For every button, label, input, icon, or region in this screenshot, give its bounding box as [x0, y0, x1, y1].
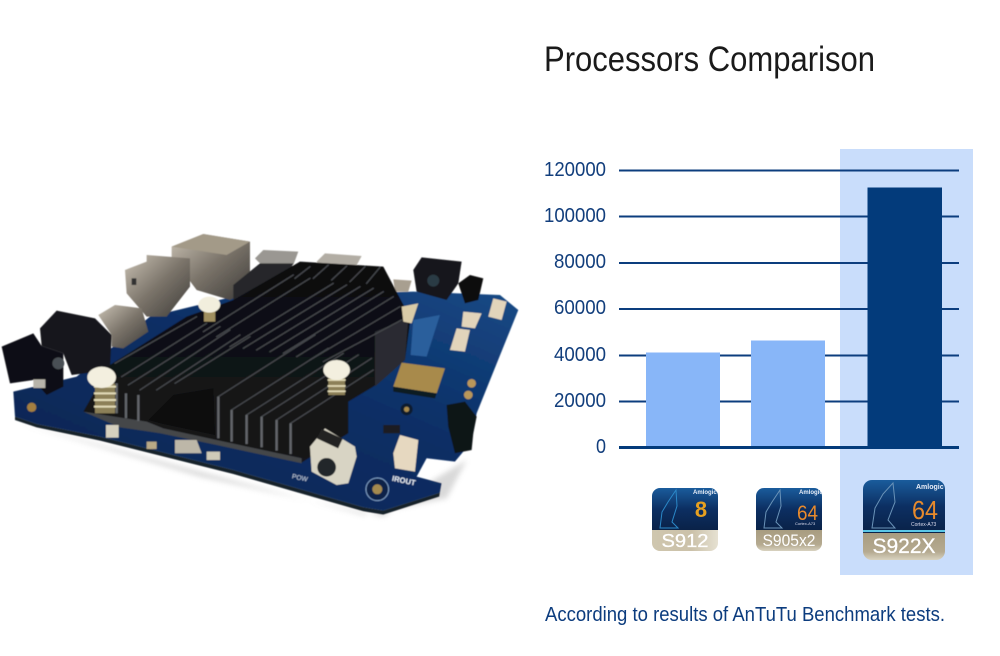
bar: S922X [868, 188, 942, 448]
bar: S912 [646, 352, 720, 446]
power button [310, 428, 357, 485]
y-axis labels [544, 158, 606, 458]
bar: S905x2 [751, 340, 825, 446]
silkscreen label: POW: POW [291, 473, 309, 484]
silkscreen label: IROUT: IROUT [391, 474, 417, 488]
chip badge: S912 [652, 488, 718, 551]
PCB [13, 292, 518, 511]
y-axis labels: 60000 [554, 296, 606, 319]
y-axis labels: 40000 [554, 343, 606, 366]
spring posts [87, 297, 350, 438]
y-axis labels: 120000 [544, 158, 606, 181]
y-axis labels: 20000 [554, 389, 606, 412]
heatsink base [83, 412, 302, 463]
chip badge: S905x2: S905x2 [762, 531, 816, 550]
front fin ends [117, 383, 291, 454]
y-axis labels: 80000 [554, 250, 606, 273]
chip badge: S905x2: Amlogic [799, 490, 823, 496]
y-axis labels: 100000 [544, 204, 606, 227]
heatsink [83, 262, 411, 463]
chip badge: S912: 8 [695, 497, 707, 522]
baseline [619, 446, 959, 449]
mounting hole [366, 478, 389, 501]
heatsink side plate [375, 318, 408, 387]
rear ports [125, 234, 483, 317]
y-axis labels: 0 [596, 435, 606, 458]
bar chart [544, 158, 959, 458]
photo: circuit board with heatsink [2, 234, 518, 517]
chip badge: S922X: S922X [872, 535, 936, 558]
highlight panel: S922X [840, 149, 973, 575]
chip badge: S912: S912 [662, 531, 708, 551]
power jacks and HDMI [2, 305, 148, 395]
chip badge: S922X: Cortex-A73 [911, 522, 937, 528]
chip badge: S922X: 64 [912, 495, 938, 525]
fins [115, 265, 402, 423]
PCB edge [15, 417, 440, 515]
title: Processors Comparison [544, 40, 875, 79]
chip badge: S905x2: Cortex-A73 [795, 521, 816, 526]
chip badge: S912: Amlogic [693, 490, 717, 496]
chip badge: S922X [863, 480, 945, 560]
center channel [148, 388, 215, 435]
board shadow [20, 423, 467, 517]
grid lines [619, 170, 959, 402]
chip badge: S905x2 [756, 488, 823, 551]
wifi module and connectors [27, 298, 507, 472]
footnote: According to results of AnTuTu Benchmark tests. [545, 604, 945, 626]
chip badge: S922X: Amlogic [916, 484, 944, 491]
chip badge: S905x2: 64 [797, 502, 818, 525]
